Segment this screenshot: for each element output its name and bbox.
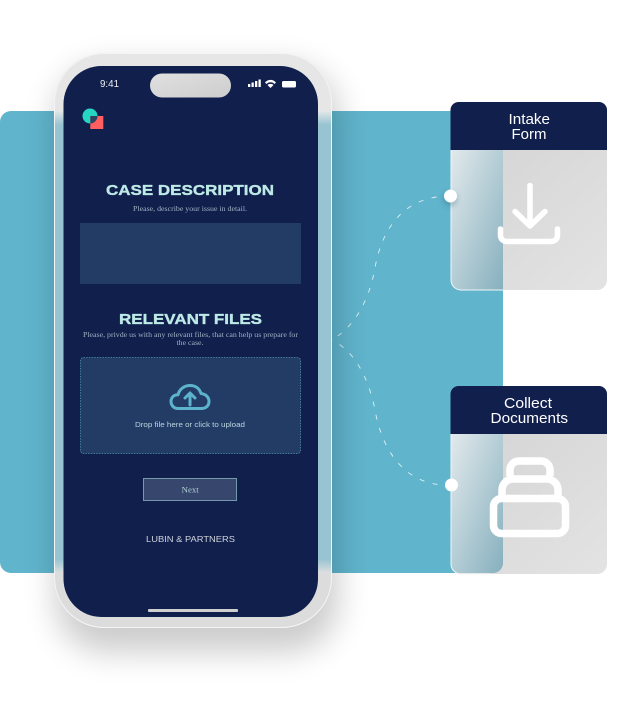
status icons (248, 80, 296, 88)
card title: Collect (504, 396, 552, 412)
phone shadow (56, 66, 338, 652)
phone screen (64, 66, 318, 617)
card title (490, 396, 568, 427)
next button (144, 478, 236, 500)
card title: Form (512, 127, 546, 143)
card header (450, 386, 607, 434)
relevant files subtitle (83, 330, 299, 347)
card header (450, 102, 607, 150)
card: intake form (450, 102, 607, 290)
heading: relevant files: RELEVANT FILES (119, 311, 262, 328)
heading: case description: CASE DESCRIPTION (106, 182, 274, 199)
connector: dashed lines from phone to cards (332, 196, 451, 485)
connector dot: intake form (443, 190, 457, 206)
dynamic island (150, 74, 231, 98)
relevant files subtitle: Please, privde us with any relevant files, that can help us prepare for (83, 330, 299, 339)
upload label: Drop file here or click to upload (135, 420, 245, 429)
status bar time: 9:41 (100, 79, 119, 90)
card body glass (451, 434, 607, 574)
home indicator (148, 609, 238, 612)
icon: document stack (494, 461, 566, 534)
relevant files subtitle: the case. (176, 338, 204, 347)
card: collect documents (450, 386, 607, 574)
card title: Intake (508, 112, 550, 128)
icon: download (500, 186, 558, 242)
next button: Next (182, 486, 200, 494)
icon: upload cloud (171, 386, 209, 408)
teal background panel (0, 111, 503, 573)
logo (82, 108, 103, 129)
brand name: LUBIN & PARTNERS (146, 534, 235, 544)
phone bezel (54, 53, 332, 628)
case description text area (80, 223, 301, 284)
file upload drop zone (80, 358, 300, 454)
card title: Documents (490, 411, 568, 427)
connector dot: collect documents (445, 478, 458, 492)
card body glass (451, 150, 607, 290)
case description subtitle: Please, describe your issue in detail. (133, 204, 247, 213)
phone (54, 53, 338, 652)
card title (508, 112, 550, 143)
